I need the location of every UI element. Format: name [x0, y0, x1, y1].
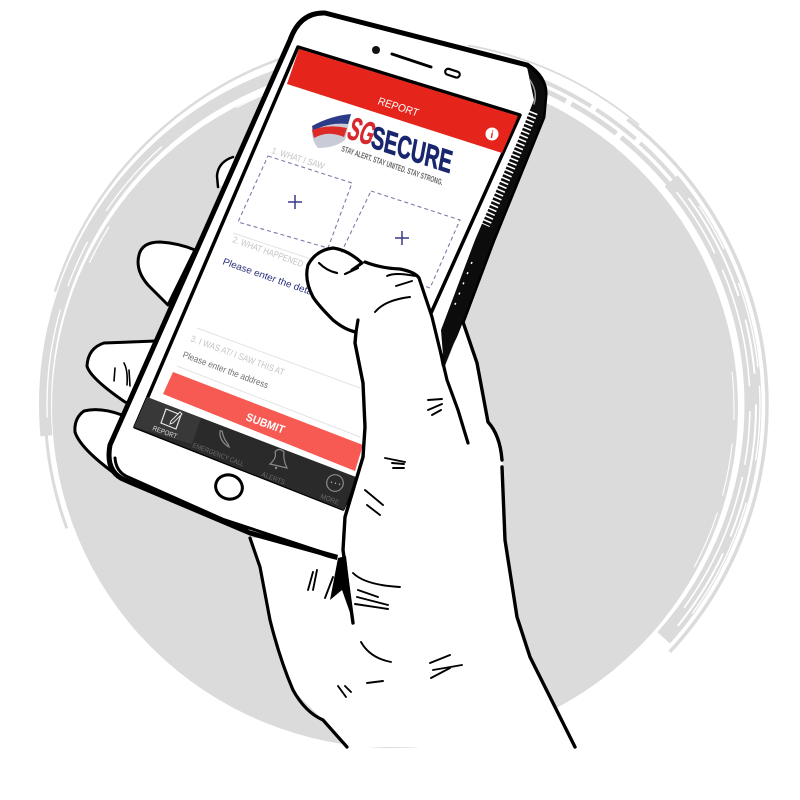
submit button: SUBMIT	[244, 412, 286, 437]
address placeholder: Please enter the address	[181, 350, 270, 390]
report tab: REPORT	[151, 425, 178, 441]
report tab	[151, 409, 182, 441]
hand right outline	[463, 322, 575, 747]
more tab	[319, 475, 343, 507]
info icon	[486, 128, 498, 141]
bottom navigation bar	[134, 397, 356, 510]
more tab: MORE	[319, 493, 340, 507]
header title: REPORT	[376, 96, 421, 119]
red header bar	[287, 49, 518, 153]
form label 3: 3. I WAS AT/ I SAW THIS AT	[189, 334, 286, 377]
alerts tab	[260, 450, 287, 487]
logo wordmark SG: SG	[344, 110, 379, 152]
hand behind phone	[250, 538, 400, 747]
submit button	[163, 372, 363, 471]
form label 1: 1. WHAT I SAW	[270, 145, 326, 171]
hand fill	[250, 248, 575, 747]
phone	[109, 13, 545, 560]
emergency call tab	[191, 431, 245, 468]
phone bottom double edge	[115, 458, 340, 560]
SGSecure logo	[312, 110, 455, 187]
logo shield	[312, 114, 351, 148]
hand left outline	[250, 538, 347, 747]
logo wordmark SECURE: SECURE	[369, 119, 455, 180]
details placeholder: Please enter the details	[221, 257, 323, 301]
info icon: i	[490, 130, 494, 141]
knuckle creases	[308, 274, 462, 697]
thumb inner line	[343, 332, 365, 623]
screen	[135, 47, 520, 509]
home button	[212, 471, 246, 503]
camera, speaker and sensor	[372, 46, 461, 78]
thumb outline	[307, 248, 468, 443]
fingers behind phone	[75, 157, 240, 473]
form divider lines	[177, 233, 360, 437]
phone body	[109, 13, 545, 558]
emergency call tab: EMERGENCY CALL	[191, 442, 245, 468]
palm spike shading	[330, 556, 354, 624]
photo box 1	[238, 156, 352, 248]
logo tagline: STAY ALERT. STAY UNITED. STAY STRONG.	[340, 143, 444, 187]
photo box 2	[340, 191, 460, 288]
phone side hatching	[441, 67, 545, 368]
alerts tab: ALERTS	[260, 471, 286, 487]
hand with thumb in front of phone	[250, 248, 575, 747]
form label 2: 2. WHAT HAPPENED	[231, 235, 305, 269]
thumb nail marks	[319, 263, 358, 274]
